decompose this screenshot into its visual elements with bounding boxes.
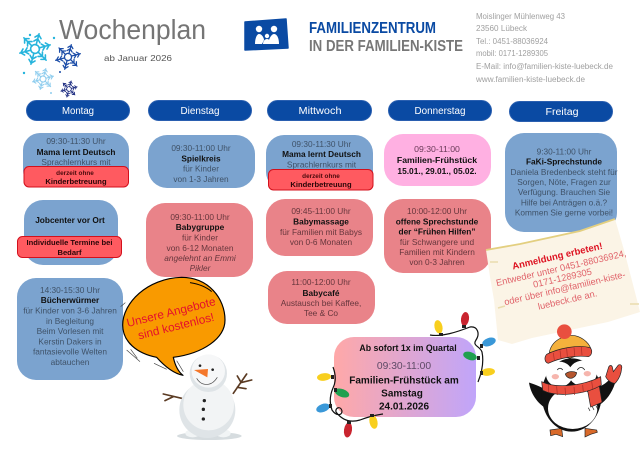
- panel: FaKi-Sprechstunde: [505, 133, 618, 232]
- heading: Donnerstag: Donnerstag: [414, 106, 466, 117]
- panel: Montag Mama lernt Deutsch: [23, 133, 129, 187]
- contact block: Tel.: 0451-88036924: [476, 37, 549, 46]
- panel: Montag Mama lernt Deutsch: Sprachlernkurs mit: [41, 157, 111, 167]
- panel: Mittwoch Mama lernt Deutsch: Kinderbetreuung: [290, 180, 352, 189]
- panel: Bücherwürmer: Beim Vorlesen mit: [37, 326, 104, 336]
- illustration: speech bubble: Unsere Angebote: [125, 294, 217, 330]
- panel: Mittwoch Mama lernt Deutsch: derzeit ohne: [302, 173, 340, 180]
- contact block: www.familien-kiste-luebeck.de: [475, 75, 586, 84]
- panel: FaKi-Sprechstunde: Kommen Sie gerne vorbei!: [515, 208, 613, 218]
- panel: Spielkreis: [148, 135, 255, 188]
- panel: Babymassage: von 0-6 Monaten: [290, 237, 353, 247]
- callout: Anmeldung erbeten note: oder über info@familien-kiste-: [503, 270, 626, 307]
- panel: Familien-Frühstück Donnerstag: [384, 134, 491, 186]
- panel: FaKi-Sprechstunde: Sorgen, Nöte, Fragen zur: [517, 177, 611, 187]
- panel: Jobcenter vor Ort: [18, 200, 122, 265]
- callout: Anmeldung erbeten note: Entweder unter 0451-88036924,: [495, 248, 627, 288]
- heading: Freitag: Freitag: [546, 107, 578, 118]
- heading: Montag: [26, 100, 130, 120]
- panel: Bücherwürmer: 14:30-15:30 Uhr: [40, 285, 100, 295]
- logo text: [309, 20, 463, 55]
- heading: Dienstag: Dienstag: [180, 106, 220, 117]
- subtitle: ab Januar 2026: ab Januar 2026: [104, 53, 172, 63]
- panel: Babymassage: 09:45-11:00 Uhr: [291, 206, 351, 216]
- panel: offene Sprechstunde: offene Sprechstunde: [396, 216, 479, 226]
- panel: Montag Mama lernt Deutsch: 09:30-11:30 Uhr: [46, 136, 106, 146]
- illustration: speech bubble: sind kostenlos!: [136, 310, 216, 342]
- heading: Montag: Montag: [62, 106, 94, 117]
- panel: Bücherwürmer: fantasievolle Welten: [33, 346, 107, 356]
- illustration: string lights top right: [430, 312, 497, 382]
- panel: offene Sprechstunde: für Schwangere und: [400, 237, 475, 247]
- panel: Bücherwürmer: [17, 278, 123, 380]
- heading: Mittwoch: Mittwoch: [298, 106, 342, 117]
- panel: Spielkreis: für Kinder: [183, 164, 219, 174]
- illustration: speech bubble: [121, 277, 225, 375]
- panel: Babycafé: Babycafé: [303, 288, 340, 298]
- panel: Familien-Frühstück am Samstag: Familien-Frühstück am: [349, 376, 459, 386]
- panel: Babycafé: Austausch bei Kaffee,: [281, 298, 361, 308]
- panel: Babycafé: Tee & Co: [304, 308, 338, 318]
- panel: Babygruppe: für Kinder: [182, 232, 218, 242]
- panel: Jobcenter vor Ort: Individuelle Termine bei: [27, 238, 112, 247]
- panel: offene Sprechstunde: der “Frühen Hilfen”: [399, 226, 475, 236]
- panel: Babygruppe: Pikler: [190, 263, 212, 273]
- contact block: E-Mail: info@familien-kiste-luebeck.de: [476, 62, 614, 71]
- panel: Montag Mama lernt Deutsch: Kinderbetreuung: [45, 177, 107, 186]
- panel: Montag Mama lernt Deutsch: derzeit ohne: [56, 170, 94, 177]
- panel: Babycafé: [268, 271, 375, 324]
- contact block: mobil: 0171-1289305: [476, 49, 549, 58]
- callout: Anmeldung erbeten note: [486, 219, 640, 344]
- heading: Freitag: [510, 102, 612, 122]
- panel: Spielkreis: Spielkreis: [181, 154, 221, 164]
- panel: Familien-Frühstück am Samstag: [334, 337, 476, 417]
- panel: offene Sprechstunde: von 0-3 Jahren: [409, 257, 465, 267]
- panel: offene Sprechstunde: [384, 199, 491, 273]
- panel: FaKi-Sprechstunde: FaKi-Sprechstunde: [526, 156, 602, 166]
- heading: Donnerstag: [388, 100, 492, 120]
- panel: Spielkreis: von 1-3 Jahren: [173, 174, 229, 184]
- logo text: IN DER FAMILIEN-KISTE: [309, 38, 463, 55]
- illustration: snowman: [163, 354, 252, 440]
- panel: Babygruppe: angelehnt an Emmi: [164, 253, 237, 263]
- panel: Bücherwürmer: in Begleitung: [46, 316, 94, 326]
- panel: Babygruppe: Babygruppe: [176, 222, 225, 232]
- callout: Anmeldung erbeten note: Anmeldung erbeten!: [511, 241, 604, 272]
- panel: FaKi-Sprechstunde: 9:30-11:00 Uhr: [537, 146, 592, 156]
- panel: Bücherwürmer: Bücherwürmer: [41, 295, 100, 305]
- panel: Familien-Frühstück Donnerstag: 09:30-11:00: [414, 144, 460, 154]
- panel: Montag Mama lernt Deutsch: Mama lernt Deutsch: [37, 147, 115, 157]
- panel: Mittwoch Mama lernt Deutsch: Mama lernt Deutsch: [282, 149, 361, 159]
- panel: Babygruppe: 09:30-11:00 Uhr: [170, 212, 230, 222]
- panel: Bücherwürmer: abtauchen: [51, 357, 90, 367]
- contact block: [475, 12, 614, 84]
- icon: snowflakes: [16, 30, 83, 99]
- title: Wochenplan: [59, 14, 206, 45]
- callout: Anmeldung erbeten note: 0171-1289305: [532, 266, 593, 290]
- panel: Jobcenter vor Ort: Bedarf: [57, 248, 82, 257]
- panel: Spielkreis: 09:30-11:00 Uhr: [171, 143, 231, 153]
- panel: FaKi-Sprechstunde: Hilfe bei Anträgen o.ä.?: [521, 198, 608, 208]
- panel: offene Sprechstunde: 10:00-12:00 Uhr: [407, 206, 467, 216]
- panel: Babymassage: [266, 199, 373, 256]
- panel: Familien-Frühstück am Samstag: Ab sofort 1x im Quartal: [359, 343, 457, 353]
- heading: Mittwoch: [268, 100, 372, 120]
- panel: Familien-Frühstück am Samstag: 09:30-11:00: [377, 361, 431, 372]
- illustration: penguin: [529, 324, 622, 437]
- logo icon: family: [245, 19, 288, 50]
- panel: FaKi-Sprechstunde: Daniela Bredenbeck steht für: [510, 167, 618, 177]
- panel: Mittwoch Mama lernt Deutsch: [266, 135, 373, 190]
- contact block: 23560 Lübeck: [476, 24, 528, 33]
- panel: Familien-Frühstück Donnerstag: 15.01., 29.01., 05.02.: [397, 166, 477, 176]
- panel: FaKi-Sprechstunde: Verfügung. Brauchen Sie: [518, 187, 611, 197]
- panel: Babycafé: 11:00-12:00 Uhr: [291, 277, 351, 287]
- panel: Babymassage: Babymassage: [293, 216, 349, 226]
- panel: Babymassage: für Familien mit Babys: [280, 227, 362, 237]
- panel: Bücherwürmer: für Kinder von 3-6 Jahren: [23, 306, 117, 316]
- illustration: string lights bottom left: [315, 367, 383, 438]
- contact block: Moislinger Mühlenweg 43: [476, 12, 566, 21]
- panel: offene Sprechstunde: Familien mit Kindern: [399, 247, 475, 257]
- panel: Familien-Frühstück Donnerstag: Familien-Frühstück: [397, 155, 477, 165]
- panel: Babygruppe: [146, 203, 253, 277]
- panel: Bücherwürmer: Kerstin Dakers in: [38, 336, 102, 346]
- panel: Mittwoch Mama lernt Deutsch: 09:30-11:30 Uhr: [292, 139, 351, 149]
- callout: Anmeldung erbeten note: luebeck.de an.: [537, 288, 598, 312]
- logo text: FAMILIENZENTRUM: [309, 20, 436, 37]
- panel: Babygruppe: von 6-12 Monaten: [167, 243, 234, 253]
- panel: Familien-Frühstück am Samstag: 24.01.2026: [379, 402, 429, 412]
- panel: Mittwoch Mama lernt Deutsch: Sprachlernkurs mit: [287, 160, 357, 170]
- panel: Familien-Frühstück am Samstag: Samstag: [381, 388, 423, 400]
- panel: Jobcenter vor Ort: Jobcenter vor Ort: [35, 215, 105, 225]
- heading: Dienstag: [148, 100, 252, 120]
